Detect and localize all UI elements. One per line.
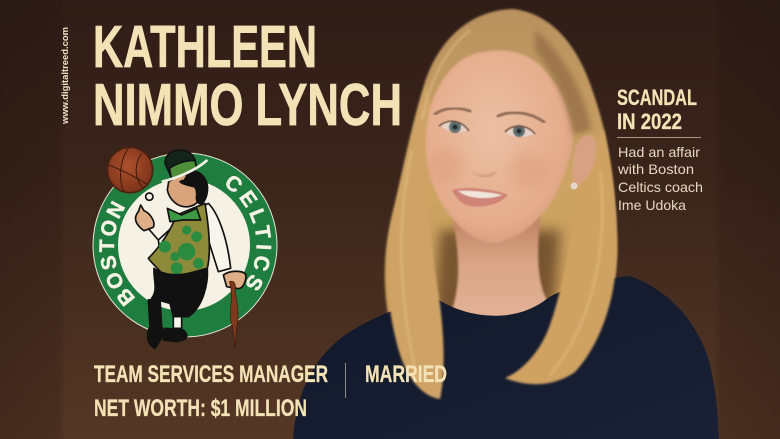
vest [148,203,209,276]
hair front right lock [505,130,617,384]
basketball [107,147,153,193]
leprechaun figure [107,147,246,348]
shamrock patches [159,225,204,274]
raised hand [136,205,154,231]
hair strands [401,30,602,380]
hair front left lock [387,85,444,399]
earring [570,182,578,190]
title [93,14,402,138]
eye brow [180,180,193,187]
cane [229,281,238,348]
logo wordmark CELTICS: CELTICS [226,176,272,290]
portrait photo [293,9,719,439]
shirt and arms [147,203,231,275]
pipe [148,197,167,200]
scandal description: Had an affair [618,144,700,160]
bottom facts [94,361,447,422]
right eye [505,125,535,137]
marital status: MARRIED [365,361,447,388]
hair back [385,9,617,399]
leg and shoes [148,298,187,348]
pipe bowl [146,193,153,200]
hat [162,150,207,182]
vertical website credit: www.digitaltreed.com [60,27,70,125]
sweater [293,276,719,439]
hair part shadow [535,30,592,135]
socks [173,317,182,328]
head [167,174,204,207]
bow tie [167,208,201,222]
scandal description: Ime Udoka [618,197,686,213]
trousers [152,268,207,317]
nose [470,168,497,177]
title: NIMMO LYNCH [93,72,402,138]
left eyebrow [435,108,470,114]
cane hand [223,271,246,289]
role: TEAM SERVICES MANAGER [94,361,328,388]
cheek blush [429,147,550,188]
Boston Celtics logo [92,146,278,350]
face [426,51,573,243]
scandal description: Celtics coach [618,179,703,195]
mouth [452,188,508,207]
scandal heading: IN 2022 [617,109,682,134]
scandal description: with Boston [617,161,694,177]
left eye [439,121,469,133]
neck [452,205,550,318]
hair [183,171,207,203]
right eyebrow [498,113,544,122]
logo inner disc [118,179,250,311]
title: KATHLEEN [93,14,317,80]
logo wordmark BOSTON: BOSTON [99,200,136,307]
net worth: NET WORTH: $1 MILLION [94,395,307,422]
logo ring [93,153,277,337]
scandal description [617,144,703,213]
ear [572,135,596,187]
scandal heading [617,85,697,134]
hair shadow [430,230,560,385]
scandal heading: SCANDAL [617,85,697,110]
